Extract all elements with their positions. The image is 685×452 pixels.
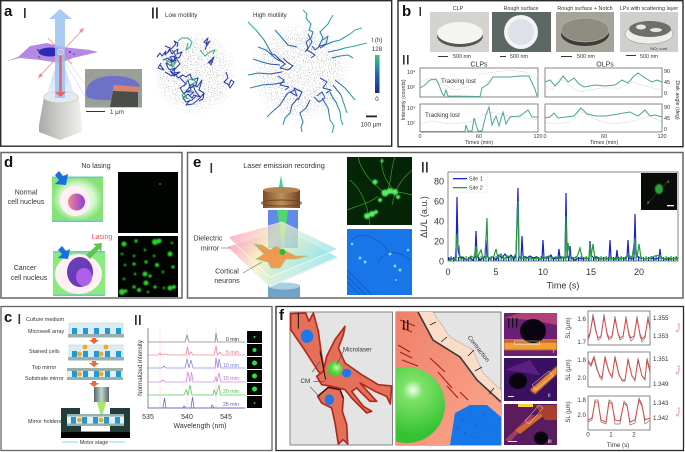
line chart ΔL/L vs time: 40 (434, 216, 444, 226)
f-II zoomed diagram (396, 312, 502, 446)
chart legend: Site 2 (469, 186, 483, 192)
CLP plots: 60 (476, 134, 482, 140)
line chart ΔL/L vs time: 20 (434, 236, 444, 246)
SL traces plot iii: 1.8 (577, 397, 587, 404)
line chart ΔL/L vs time: 10 (538, 267, 548, 277)
SL traces plot iii: 1.343 (653, 400, 669, 407)
spectra chart: Wavelength (nm) (173, 423, 227, 430)
step 1 device (68, 323, 124, 338)
colorbar t(h) (371, 37, 383, 103)
CLP plots (401, 62, 542, 146)
section mark II (152, 8, 158, 18)
SEM image: rough surface: Rough surface (503, 6, 539, 12)
CLP plots: 10⁴ (407, 106, 416, 112)
step 3 device (67, 368, 123, 380)
line chart ΔL/L vs time (419, 172, 678, 290)
SL traces plot i: 1.6 (577, 316, 587, 323)
Contraction label: Contraction (466, 334, 491, 364)
SEM image: rough surface + notch (556, 6, 614, 60)
SEM image: LPs with scattering layer (620, 6, 678, 60)
CLP plots: Tracking lost (441, 78, 476, 85)
SL traces plot ii: n (675, 372, 681, 375)
SL traces plot ii: 2.0 (577, 375, 587, 382)
section mark II (422, 162, 428, 172)
Dielectric mirror label: Dielectric (194, 236, 223, 242)
mirror label: mirror (201, 246, 220, 252)
panel label c: c (4, 309, 12, 326)
f-III microscopy image ii (504, 358, 557, 401)
panel label d: d (4, 154, 13, 171)
line chart ΔL/L vs time: 0 (439, 256, 444, 266)
OLP plots: 120 (658, 134, 666, 140)
SL traces plot i: 1.353 (653, 333, 669, 340)
SL traces plot i (566, 311, 681, 346)
step labels: Substrate mirror (25, 376, 64, 382)
panel c (1, 306, 272, 450)
step labels: Culture medium (26, 317, 65, 323)
OLP plots: 60 (601, 134, 607, 140)
SL traces plot ii: 1.351 (653, 356, 669, 363)
high motility tracks (248, 10, 367, 133)
High motility label: High motility (253, 12, 288, 19)
SL traces plot ii: SL (µm) (566, 359, 572, 381)
spectra chart: 540 (181, 414, 193, 421)
OLP plots: 45 (664, 80, 670, 86)
fluorescence image neurons (347, 157, 412, 225)
SEM image: CLP (430, 6, 489, 60)
OLP plots: 0 (664, 91, 667, 97)
Microlaser label: Microlaser (343, 346, 372, 354)
SL traces plot ii: cell (676, 365, 681, 372)
panel label b: b (402, 3, 411, 20)
No lasing label: No lasing (81, 163, 111, 170)
step labels: Top mirror (32, 365, 56, 371)
OLP plots: OLPs (596, 62, 614, 68)
step labels: Mirror holders (28, 419, 62, 425)
fluorescence image: no lasing (118, 172, 178, 233)
SL traces plot iii: 2 (632, 432, 636, 438)
SL traces plot iii: 1 (609, 432, 613, 438)
spectra thumbnails (247, 331, 262, 408)
Normal cell nucleus label: Normal (15, 190, 38, 196)
OLP plots: 90 (664, 69, 670, 75)
inset fluorescence image: 2 (647, 200, 650, 205)
Low motility label: Low motility (165, 12, 198, 19)
spectra chart: 5 min (226, 350, 239, 356)
SEM image: LPs with scattering layer: LPs with scattering layer (620, 6, 678, 12)
spectra chart: 15 min (223, 376, 239, 382)
line chart ΔL/L vs time: 60 (434, 196, 444, 206)
SL traces plot iii: SL (µm) (566, 401, 572, 423)
section mark II (403, 55, 409, 64)
SL traces plot iii (566, 396, 681, 449)
SEM image: rough surface (492, 6, 551, 60)
line chart ΔL/L vs time: 15 (586, 267, 596, 277)
Laser emission recording label: Laser emission recording (243, 161, 325, 170)
CLP plots: 10² (407, 121, 415, 127)
SL traces plot iii: cell (676, 407, 681, 414)
scale bar 100 µm: 100 µm (361, 122, 381, 128)
spectra chart: 10 min (223, 363, 239, 369)
panel b (398, 1, 683, 147)
panel d (1, 152, 182, 298)
Cortical label: Cortical (215, 268, 239, 276)
SEM image: rough surface + notch: Rough surface + Notch (557, 6, 613, 12)
colorbar t(h): t (h) (371, 37, 383, 44)
SL traces plot i: SL (µm) (566, 317, 572, 339)
line chart ΔL/L vs time: Time (s) (547, 280, 579, 290)
CLP plots: 0 (418, 134, 422, 140)
cell on objective schematic (7, 9, 98, 140)
panel e (188, 152, 683, 298)
scale bar 100 µm (361, 116, 381, 128)
SL traces plot iii: 2.0 (577, 412, 587, 419)
SL traces plot ii: 1.349 (653, 381, 669, 388)
section mark I (210, 163, 212, 173)
line chart ΔL/L vs time: 80 (434, 176, 444, 186)
CLP plots: 10⁴ (407, 70, 416, 76)
line chart ΔL/L vs time: 0 (445, 267, 451, 277)
f-III microscopy image i: i (553, 349, 554, 355)
spectra chart: 545 (220, 414, 232, 421)
laser recording schematic (221, 175, 338, 297)
motor stage label with arrows: Motor stage (80, 440, 108, 446)
line chart ΔL/L vs time: 20 (634, 267, 644, 277)
spectra chart: 25 min (223, 402, 239, 408)
panel label a: a (4, 3, 13, 20)
f-III microscopy image iii: iii (548, 439, 552, 445)
SL traces plot i: n (675, 330, 681, 333)
CLP plots: Intensity (counts) (401, 79, 407, 121)
f-II mark (403, 320, 408, 330)
SL traces plot ii (566, 352, 681, 388)
SL traces plot i: 1.7 (577, 339, 587, 346)
spectra chart: Normalized intensity (137, 339, 144, 396)
cell nucleus caption: cell nucleus (11, 275, 48, 282)
OLP plots: 45 (664, 116, 670, 122)
OLP plots (544, 62, 680, 146)
SL traces plot ii: 1.8 (577, 357, 587, 364)
SL traces plot iii: n (675, 414, 681, 417)
f-III microscopy image i (504, 313, 557, 356)
chart legend (452, 174, 487, 192)
fluorescence image: lasing (118, 236, 178, 297)
SEM image: CLP: CLP (453, 6, 464, 12)
spectra chart: 20 min (223, 389, 239, 395)
CLP plots: Times (min) (465, 140, 493, 146)
SEM image: CLP: 500 nm (453, 54, 471, 60)
f-I cardiomyocyte overview (290, 312, 392, 445)
SL traces plot iii: Time (s) (607, 442, 629, 449)
OLP plots: Disk angle (deg) (674, 80, 680, 120)
motor stage label with arrows (62, 440, 125, 446)
Lasing label: Lasing (92, 234, 112, 241)
panel f (276, 306, 684, 450)
spectra chart (137, 328, 245, 430)
SL traces plot i: cell (676, 323, 681, 330)
orange arrows (89, 338, 99, 387)
section mark I (24, 8, 26, 18)
f-III microscopy image iii (504, 404, 557, 445)
CM label: CM (300, 378, 310, 385)
SL traces plot iii: 1.342 (653, 415, 669, 422)
CLP plots: 10² (407, 85, 415, 91)
cell nucleus caption: cell nucleus (8, 199, 45, 206)
SEM image: LPs with scattering layer: 500 nm (640, 54, 658, 60)
spectra chart: 535 (142, 414, 154, 421)
low motility tracks (153, 31, 237, 115)
SEM image: rough surface + notch: 500 nm (577, 54, 595, 60)
spectra chart: 0 min (226, 337, 239, 343)
step labels (25, 317, 65, 425)
panel label f: f (279, 307, 285, 324)
line chart ΔL/L vs time: ΔL/L (a.u.) (419, 196, 429, 238)
SEM inset (85, 69, 142, 116)
OLP plots: 90 (664, 105, 670, 111)
CLP plots: Tracking lost (425, 112, 460, 119)
panel a (1, 1, 392, 146)
CLP plots: 120 (534, 134, 542, 140)
inset fluorescence image: 1 (667, 179, 670, 184)
colorbar t(h): 0 (375, 96, 379, 103)
SL traces plot i: 1.355 (653, 315, 669, 322)
SL traces plot iii: 0 (586, 432, 590, 438)
step labels: Microwell array (28, 329, 65, 335)
OLP plots: 0 (664, 127, 667, 133)
section mark II (135, 315, 141, 325)
SEM inset: 1 µm (110, 109, 124, 116)
section mark I (18, 314, 20, 324)
CLP plots: CLPs (470, 62, 488, 68)
neurons label: neurons (214, 278, 240, 285)
f-III microscopy image ii: ii (548, 393, 550, 399)
section mark I (420, 7, 421, 16)
panel label e: e (193, 154, 201, 171)
phase contrast image neurons (347, 229, 412, 295)
OLP plots: Times (min) (590, 140, 618, 146)
SEM image: rough surface: 500 nm (510, 54, 528, 60)
step labels: Stained cells (29, 349, 60, 355)
chart legend: Site 1 (469, 176, 483, 182)
Cancer label: Cancer (14, 265, 37, 272)
step 2 device (68, 345, 124, 360)
microscope objective and holder (61, 387, 130, 438)
normal cell schematic (52, 171, 103, 222)
OLP plots: 0 (544, 134, 546, 140)
SEM image: LPs with scattering layer: SiO₂ coat (650, 46, 668, 51)
cancer cell schematic (53, 243, 105, 296)
line chart ΔL/L vs time: 5 (493, 267, 499, 277)
inset fluorescence image (641, 173, 677, 210)
colorbar t(h): 128 (372, 46, 383, 53)
